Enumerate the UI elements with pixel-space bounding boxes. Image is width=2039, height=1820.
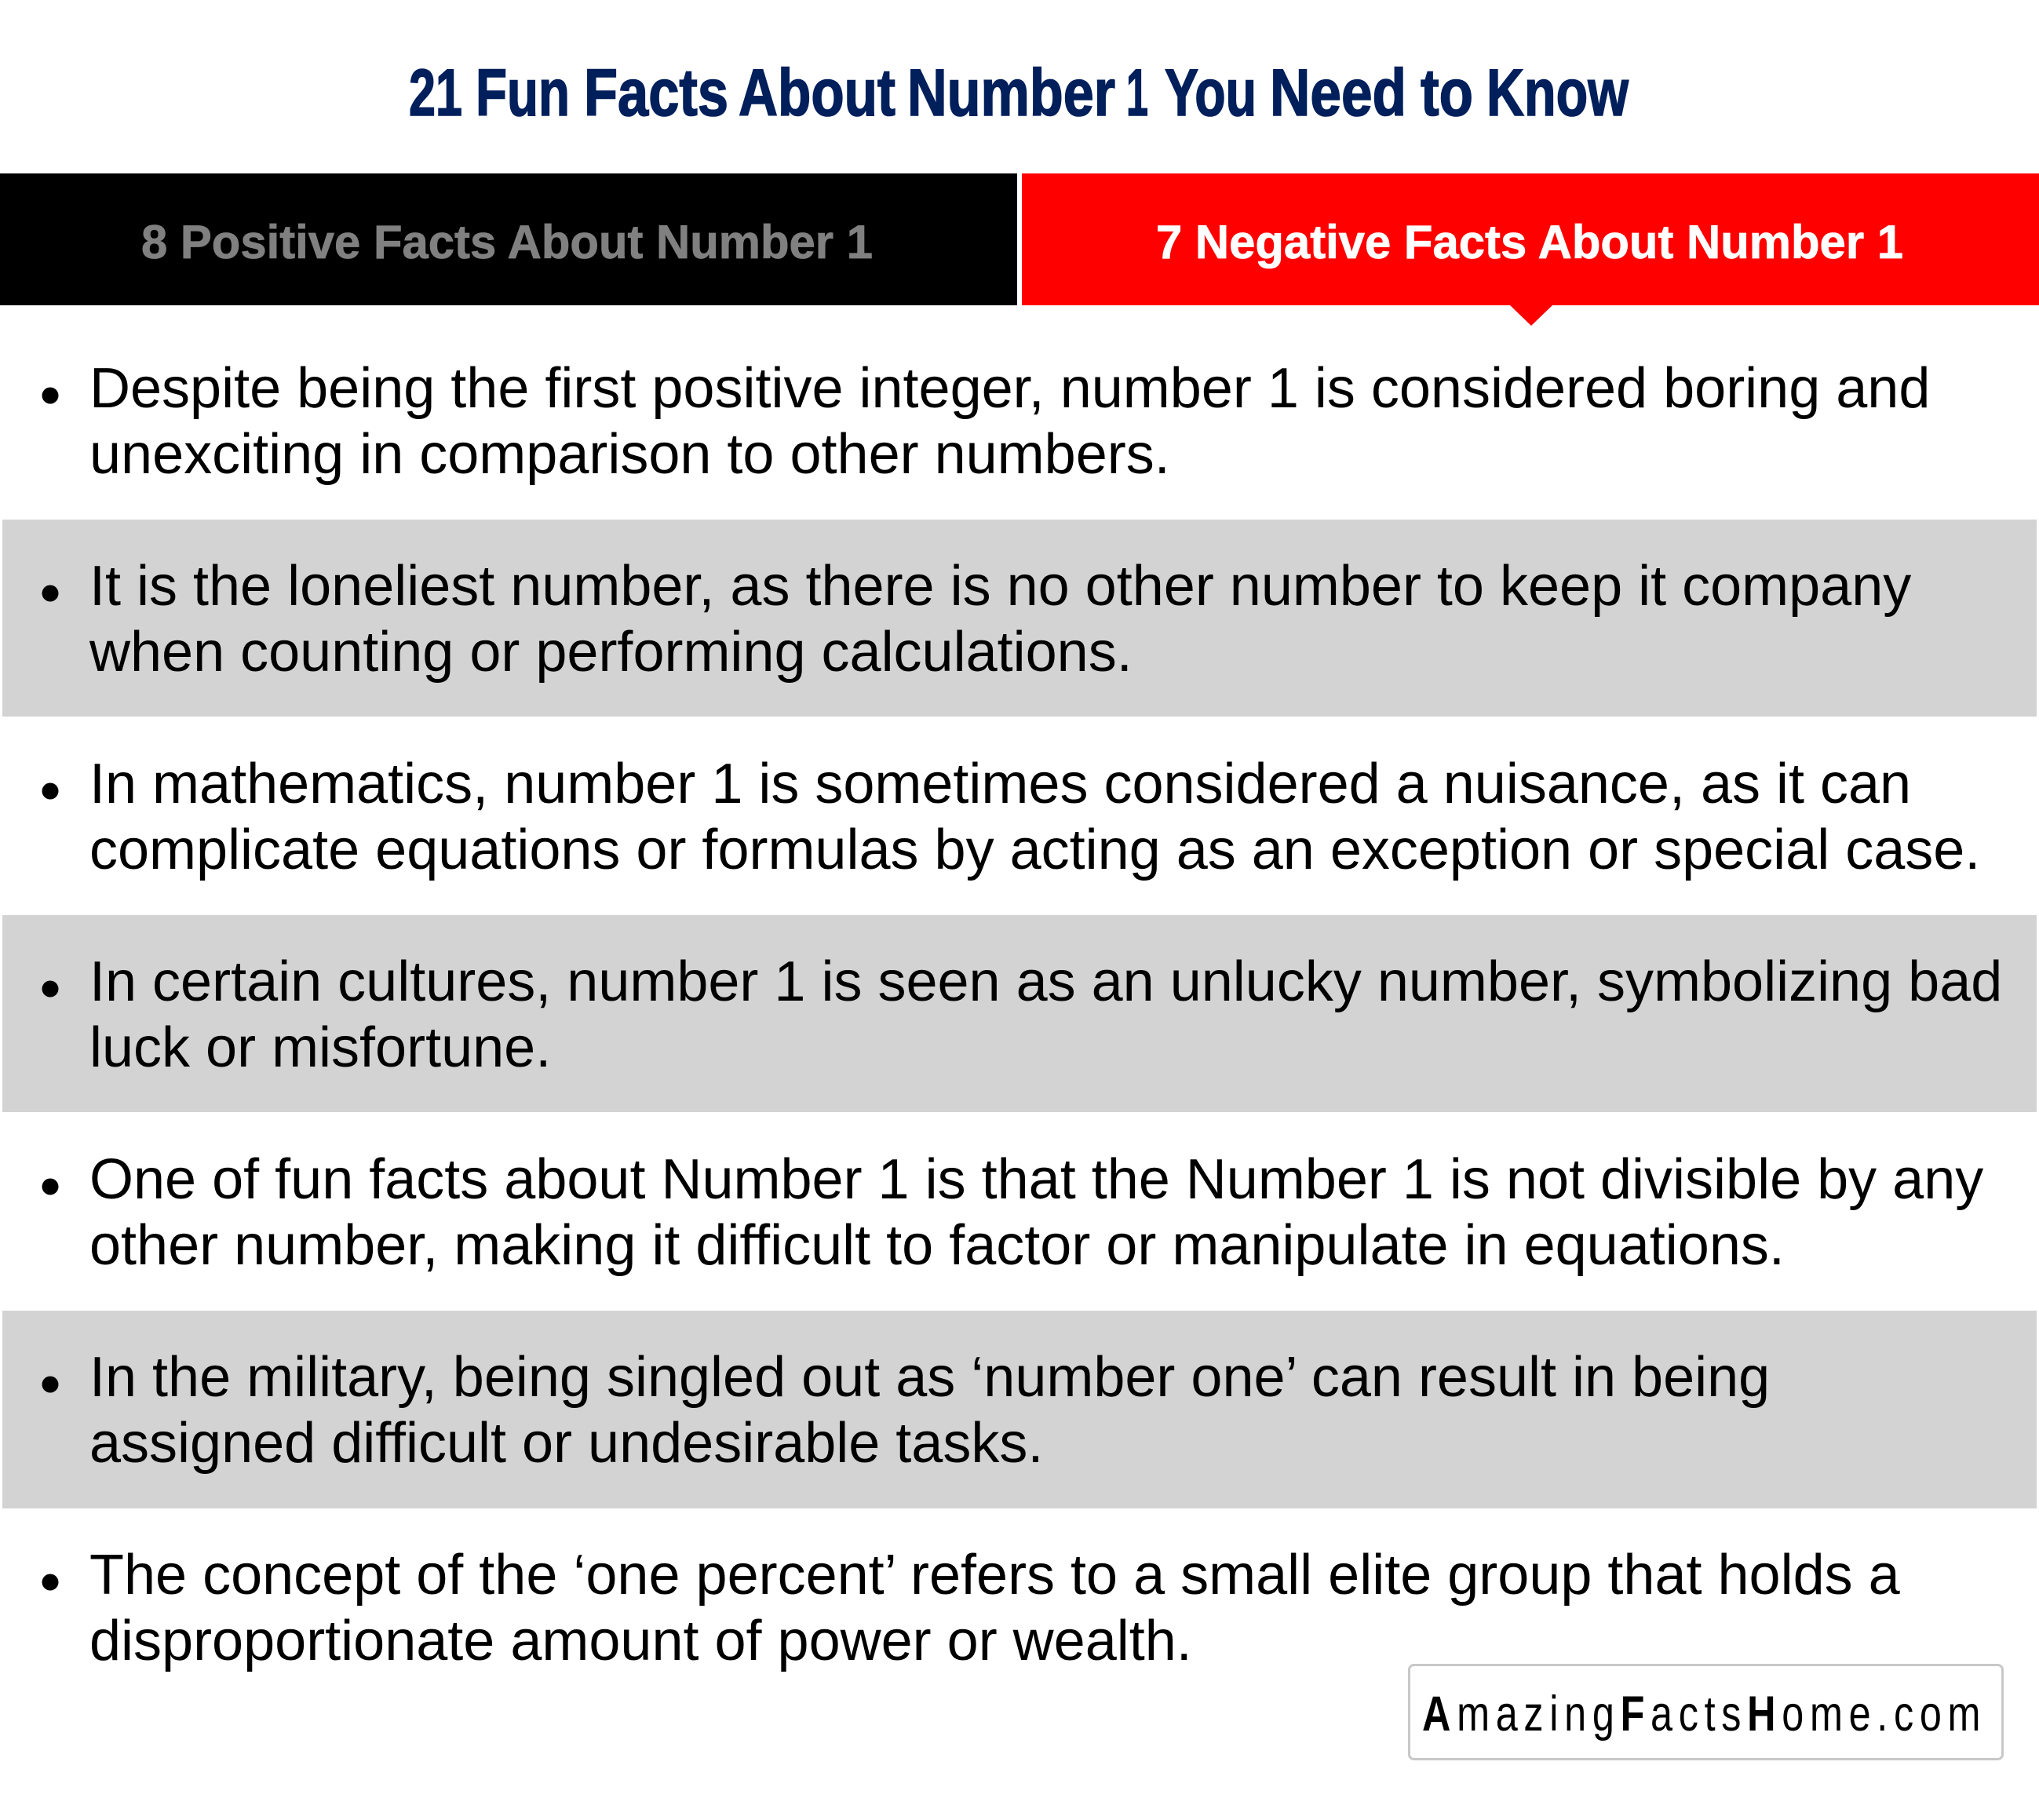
fact 4: In certain cultures, number 1 is seen as an unlucky number, symbolizing bad bbox=[89, 950, 2002, 1013]
fact 5 bbox=[42, 1148, 1983, 1277]
fact 6: In the military, being singled out as ‘number one’ can result in being bbox=[89, 1346, 1770, 1409]
title: 21 bbox=[409, 56, 462, 129]
tab: positive facts: 8 Positive Facts About Number 1 bbox=[141, 216, 873, 268]
fact 1: unexciting in comparison to other numbers. bbox=[89, 423, 1170, 486]
title bbox=[409, 56, 1629, 129]
fact 1: Despite being the first positive integer, number 1 is considered boring and bbox=[89, 357, 1930, 420]
tab: positive facts bbox=[0, 173, 1017, 305]
fact 7: The concept of the ‘one percent’ refers to a small elite group that holds a bbox=[89, 1544, 1901, 1607]
fact 1 bbox=[42, 357, 1930, 486]
fact 7: disproportionate amount of power or wealth. bbox=[89, 1610, 1192, 1672]
fact 2: when counting or performing calculations. bbox=[89, 621, 1133, 684]
title: Facts bbox=[584, 56, 728, 129]
title: to bbox=[1421, 56, 1473, 129]
fact 4: luck or misfortune. bbox=[89, 1016, 551, 1079]
title: Know bbox=[1486, 56, 1629, 129]
fact 3: complicate equations or formulas by acting as an exception or special case. bbox=[89, 819, 1980, 881]
fact 7 bbox=[42, 1544, 1901, 1672]
logo: AmazingFactsHome.com bbox=[1410, 1665, 2003, 1760]
title: You bbox=[1165, 56, 1257, 129]
fact 5: One of fun facts about Number 1 is that the Number 1 is not divisible by any bbox=[89, 1148, 1983, 1211]
fact 6: assigned difficult or undesirable tasks. bbox=[89, 1412, 1043, 1475]
title: Fun bbox=[476, 56, 570, 129]
fact 5: other number, making it difficult to factor or manipulate in equations. bbox=[89, 1214, 1785, 1277]
title: About bbox=[739, 56, 895, 129]
title: Number bbox=[907, 56, 1115, 129]
fact 3 bbox=[42, 753, 1980, 881]
fact 2 bbox=[2, 520, 2037, 717]
fact 6 bbox=[2, 1311, 2037, 1508]
title: Need bbox=[1270, 56, 1406, 129]
fact 4 bbox=[2, 915, 2037, 1112]
logo: AmazingFactsHome.com: AmazingFactsHome.com bbox=[1422, 1687, 1986, 1742]
tab: negative facts: 7 Negative Facts About Number 1 bbox=[1156, 216, 1903, 268]
tab: negative facts bbox=[1022, 173, 2039, 326]
title: 1 bbox=[1126, 56, 1148, 129]
fact 2: It is the loneliest number, as there is no other number to keep it company bbox=[89, 555, 1911, 618]
fact 3: In mathematics, number 1 is sometimes considered a nuisance, as it can bbox=[89, 753, 1911, 815]
